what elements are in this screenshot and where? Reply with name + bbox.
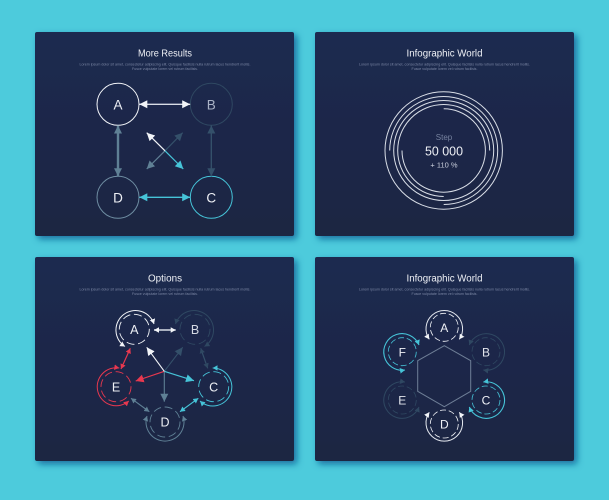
description text — [80, 62, 250, 71]
node E — [384, 382, 419, 418]
node D: D — [440, 418, 449, 432]
node F: F — [399, 345, 406, 359]
node A — [97, 83, 139, 125]
title: Infographic World: Infographic World — [406, 274, 482, 284]
node B: B — [207, 97, 216, 112]
node C: C — [482, 394, 491, 408]
arrows: diagonal cross — [147, 133, 183, 169]
description text: Lorem ipsum dolor sit amet, consectetur adipiscing elit. Quisque facilisis nulla rutrum lacus hendrerit mollis. — [80, 62, 250, 66]
node C — [469, 382, 505, 418]
node C: C — [206, 190, 216, 205]
node A: A — [440, 321, 448, 335]
node B — [469, 334, 505, 370]
concentric progress rings — [385, 92, 502, 209]
arrow: B to C — [210, 126, 212, 176]
arrow: A to D — [117, 126, 119, 176]
description text: Fusce vulputate lorem vel rutrum facilisis. — [412, 67, 478, 71]
description text: Fusce vulputate lorem vel rutrum facilisis. — [132, 292, 198, 296]
panel: More Results — [35, 32, 294, 236]
node A: A — [130, 323, 139, 337]
title: Infographic World: Infographic World — [406, 48, 482, 60]
description text: Lorem ipsum dolor sit amet, consectetur adipiscing elit. Quisque facilisis nulla rutrum lacus hendrerit mollis. — [80, 288, 250, 292]
arrow: D to C — [139, 196, 190, 198]
description text: Lorem ipsum dolor sit amet, consectetur adipiscing elit. Quisque facilisis nulla rutrum lacus hendrerit mollis. — [359, 288, 530, 292]
description text: Lorem ipsum dolor sit amet, consectetur adipiscing elit. Quisque facilisis nulla rutrum lacus hendrerit mollis. — [359, 62, 530, 66]
panel: Options — [35, 257, 294, 461]
description text: Fusce vulputate lorem vel rutrum facilisis. — [132, 67, 198, 71]
node A — [426, 311, 463, 341]
node D: D — [160, 416, 170, 430]
node D — [97, 176, 139, 218]
node F — [384, 334, 419, 370]
title: Options: Options — [148, 274, 182, 284]
node B — [176, 311, 214, 346]
arrow: A to B — [139, 103, 190, 105]
node C — [190, 176, 232, 218]
node A — [116, 311, 154, 346]
label: Step: Step — [436, 133, 453, 142]
description text — [359, 62, 530, 71]
description text — [359, 288, 530, 296]
title: More Results: More Results — [138, 48, 192, 60]
description text — [80, 288, 250, 296]
node D — [426, 410, 463, 441]
panel: Infographic World rings — [315, 32, 574, 236]
arrows from centre — [136, 347, 194, 402]
node D: D — [113, 190, 123, 205]
node A: A — [113, 97, 123, 112]
node C: C — [209, 380, 218, 394]
value: + 110 %: + 110 % — [430, 160, 458, 170]
node E: E — [112, 380, 120, 394]
node E: E — [398, 394, 406, 408]
panel: Infographic World hexagon — [315, 257, 574, 461]
node B — [190, 83, 232, 125]
node B: B — [191, 323, 199, 337]
description text: Fusce vulputate lorem vel rutrum facilisis. — [412, 292, 478, 296]
node E — [97, 368, 131, 406]
node B: B — [482, 345, 490, 359]
node D — [146, 407, 184, 441]
value: 50 000: 50 000 — [425, 144, 463, 158]
hexagon — [418, 346, 471, 407]
arrows between nodes — [121, 330, 208, 412]
node C — [199, 368, 232, 406]
